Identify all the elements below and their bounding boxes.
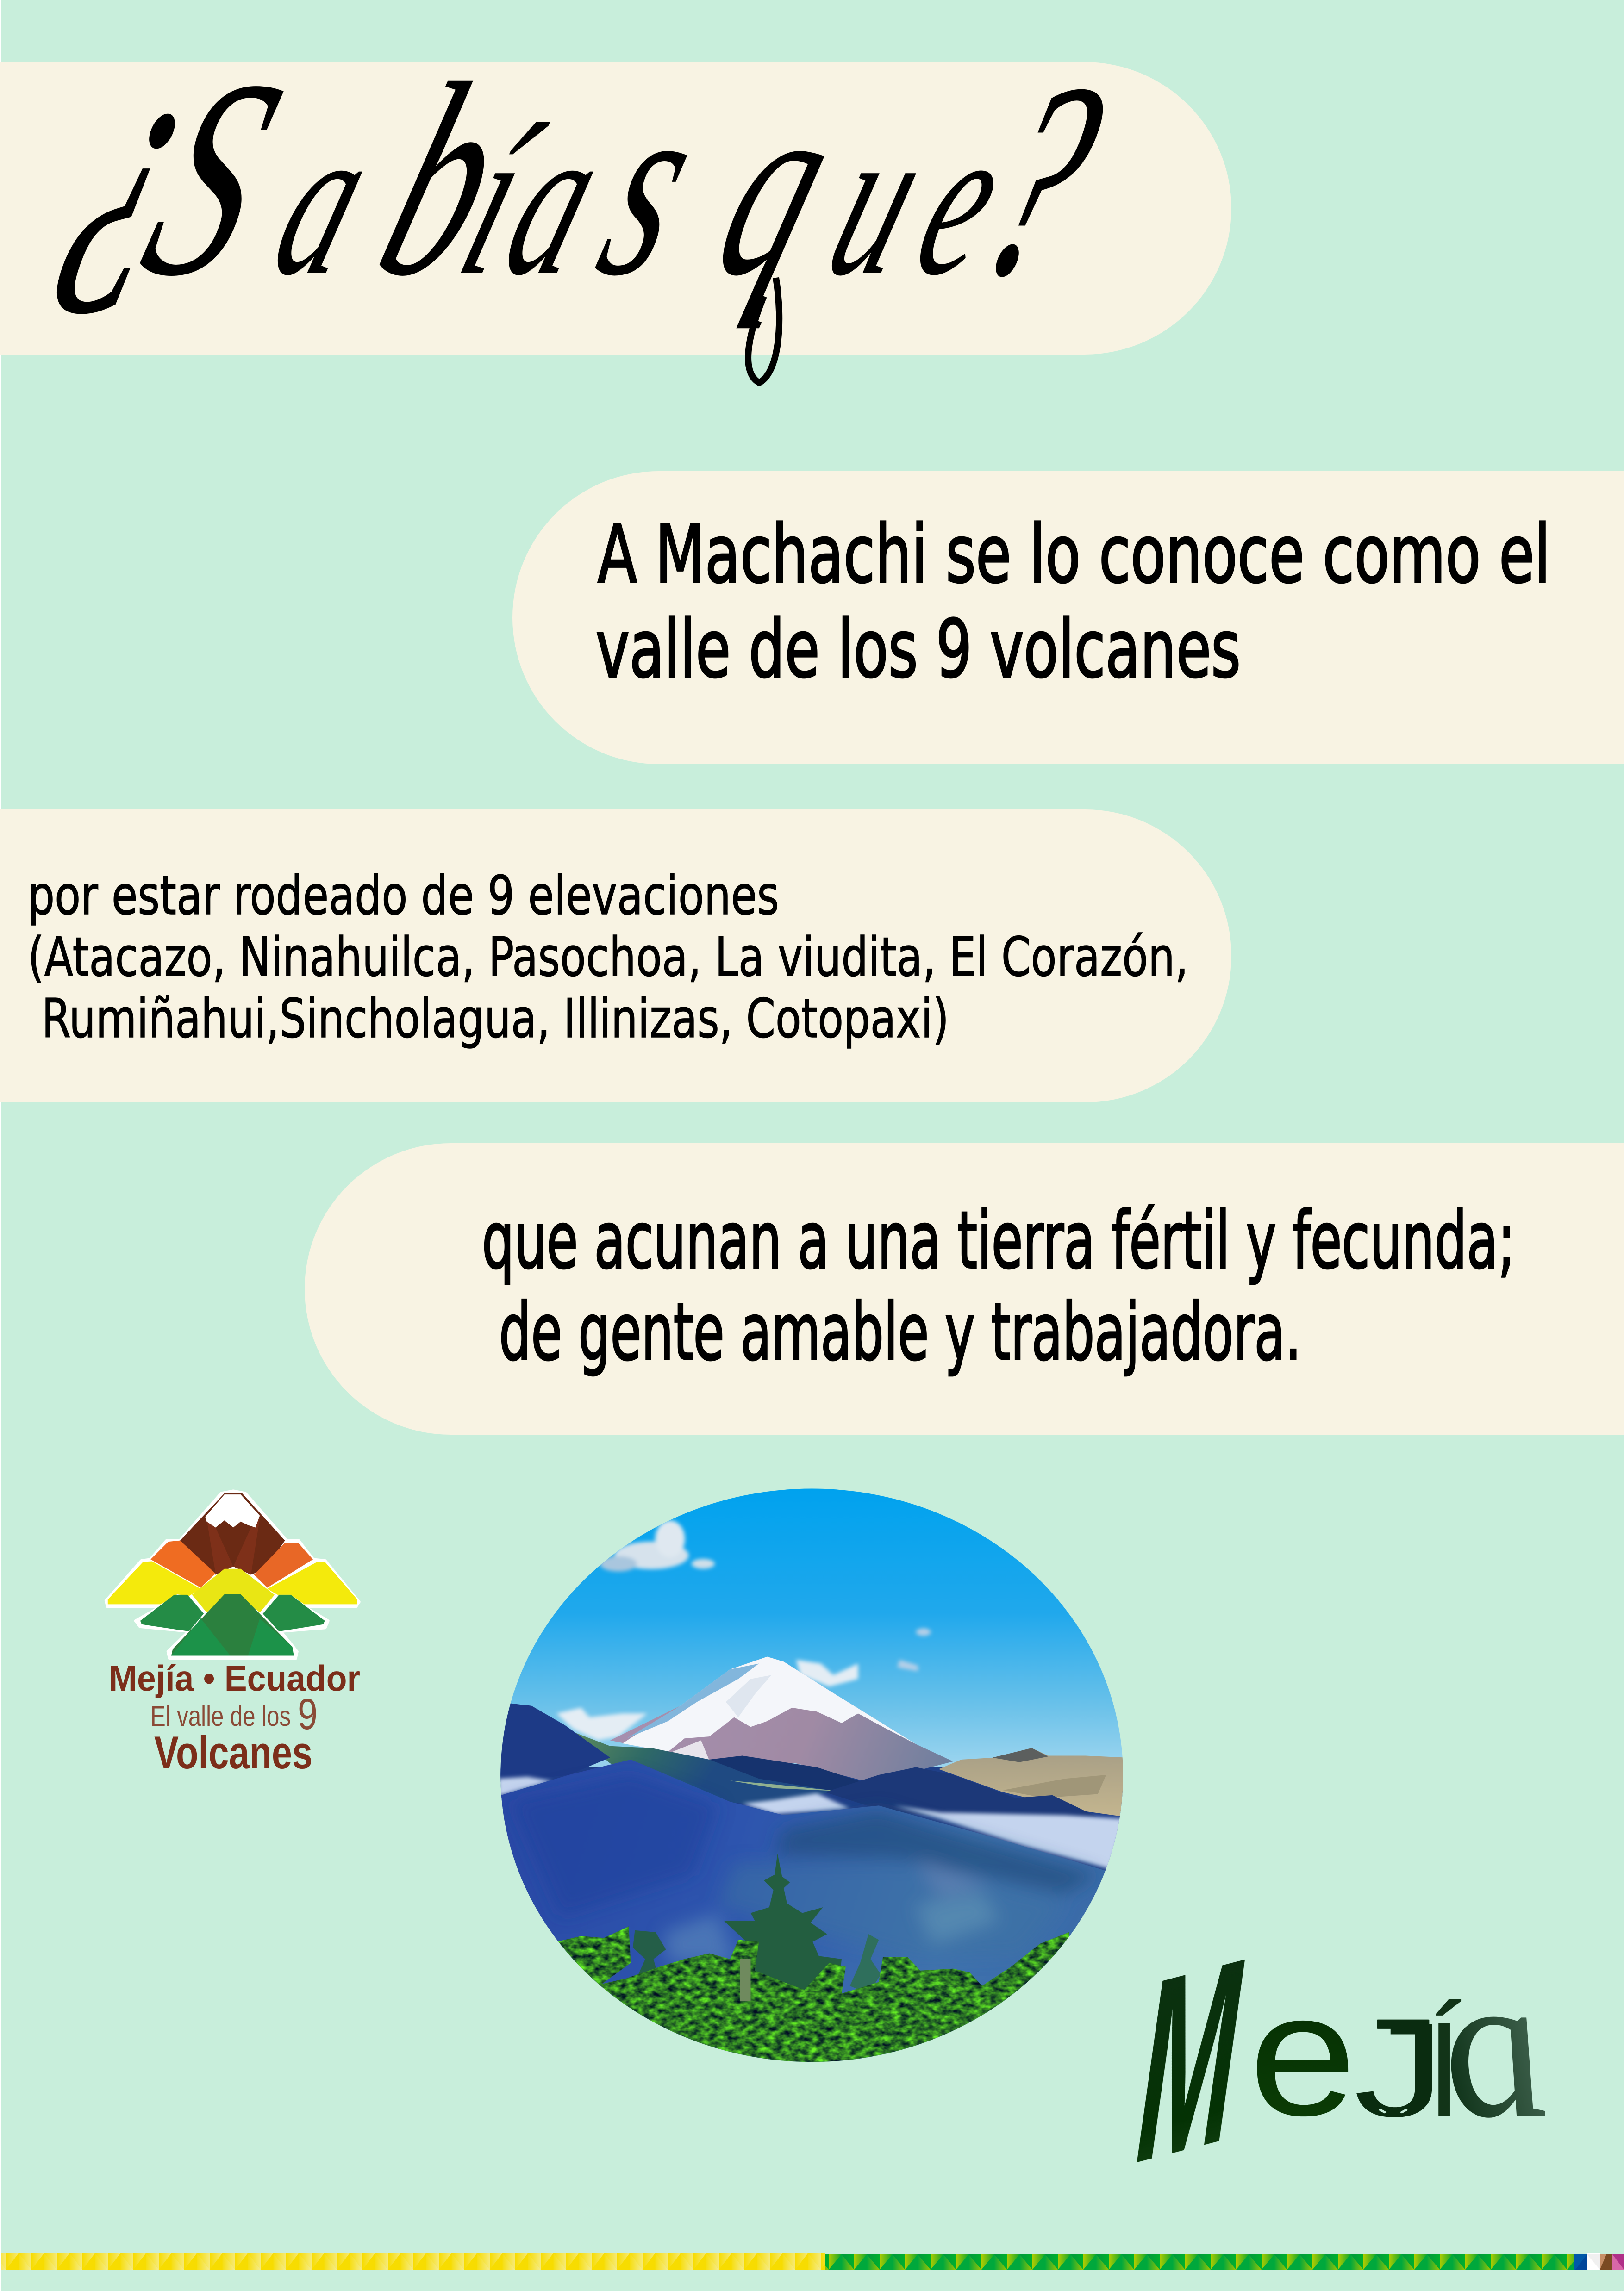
title: e (893, 80, 1031, 320)
text: elevaciones line 2: (Atacazo, Ninahuilca, Pasochoa, La viudita, El Corazón, (28, 926, 1188, 989)
letter a: a (1409, 1929, 1570, 2161)
strip: yellow (1, 2253, 825, 2270)
title: u (806, 80, 951, 320)
panel: elevaciones (0, 809, 1231, 1102)
tan hills (939, 1748, 1127, 1817)
decorative strip (1, 2253, 1624, 2270)
foliage (552, 1926, 1073, 2063)
letter M: M (1121, 1900, 1261, 2221)
title (32, 0, 1134, 383)
title: s (573, 42, 729, 330)
snow cap (623, 1657, 916, 1752)
logo text: 9: 9 (298, 1690, 318, 1739)
letter j: J (1354, 1995, 1446, 2145)
title: ? (948, 26, 1134, 334)
icon: mountains (106, 1491, 359, 1659)
logo: Mejía Ecuador (106, 1491, 360, 1778)
base (486, 1767, 1148, 2074)
main blue hill (499, 1760, 1106, 2063)
sky (501, 1488, 1123, 1817)
title: í (438, 80, 565, 320)
title: a (483, 80, 628, 320)
right dark hill (825, 1767, 1098, 1817)
strip: brown (1600, 2254, 1612, 2270)
wordmark: Mejía (1121, 1900, 1570, 2221)
hill patches (511, 1775, 1098, 1963)
title: S (114, 22, 309, 334)
left dark hill (499, 1702, 610, 1783)
strip: blue (1574, 2254, 1587, 2270)
photo: Cotopaxi volcano (500, 1488, 1123, 2062)
clouds (556, 1520, 931, 1740)
strip: green (825, 2254, 1574, 2270)
logo text: El valle de los: El valle de los (150, 1700, 291, 1732)
text: elevaciones line 3: Rumiñahui,Sincholagua, Illinizas, Cotopaxi) (42, 988, 949, 1050)
title: b (350, 26, 537, 334)
trunk (740, 1959, 750, 2001)
green ridge (575, 1733, 837, 1805)
panel: Machachi (512, 471, 1624, 764)
logo text: Mejía Ecuador: Mejía • Ecuador (109, 1658, 360, 1699)
logo text: Volcanes: Volcanes (154, 1727, 312, 1778)
panel: tierra fértil (305, 1143, 1624, 1435)
conifer tree (724, 1854, 842, 2001)
strip: white (1587, 2253, 1600, 2270)
letter e: e (1249, 1956, 1357, 2152)
letter i accent: Í (1427, 1995, 1462, 2145)
fog (499, 1777, 1125, 1869)
text: elevaciones line 1: por estar rodeado de 9 elevaciones (28, 865, 779, 927)
text: Machachi line 2: valle de los 9 volcanes (596, 603, 1241, 696)
volcano (610, 1657, 953, 1783)
title: q (691, 42, 865, 330)
dark ridge (709, 1756, 864, 1792)
title: a (251, 80, 397, 320)
panel: title pill (0, 0, 1231, 383)
strip: pink (1612, 2254, 1624, 2270)
